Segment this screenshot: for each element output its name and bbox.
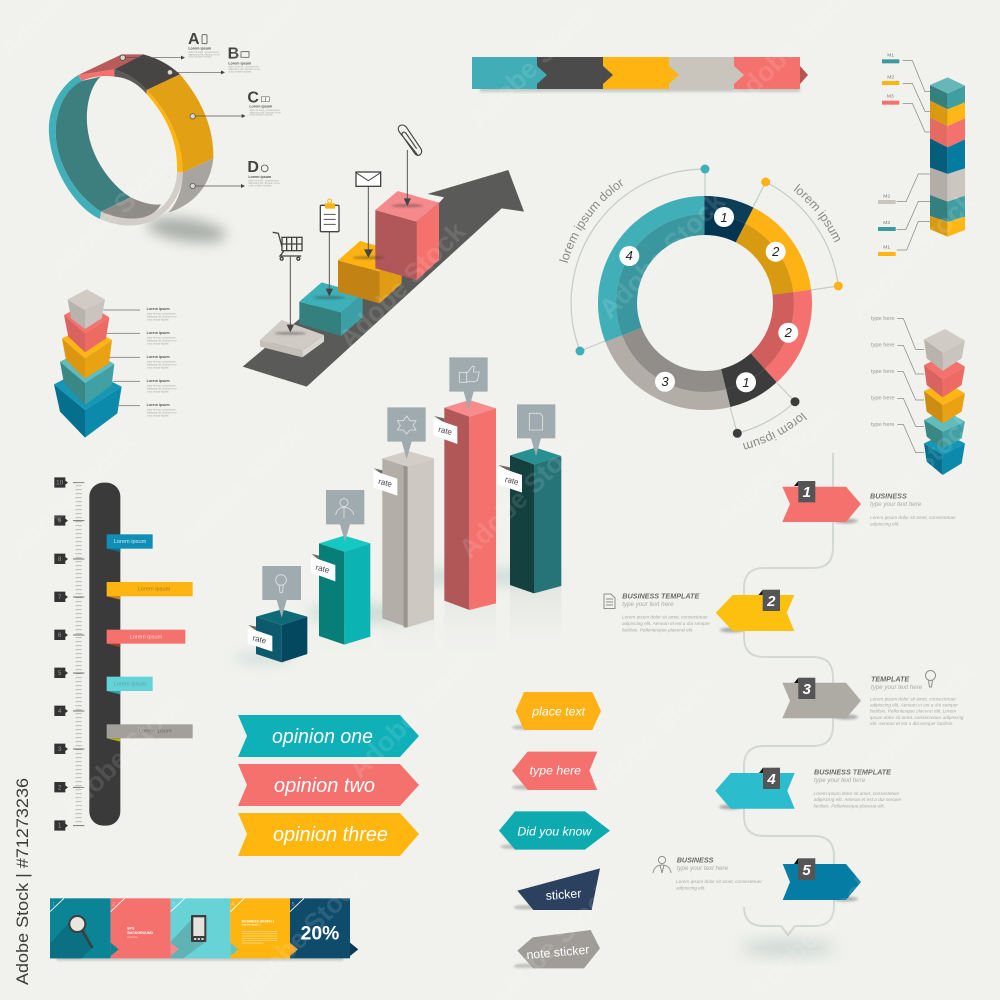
ribbon: opinion three: opinion three (273, 824, 388, 846)
donut chart (559, 164, 843, 450)
step 1 tan slab (260, 320, 324, 357)
watermark: Adobe Stock (583, 666, 722, 804)
text: business template: type your text here (814, 777, 866, 784)
callout A (120, 31, 220, 60)
watermark: Adobe Stock (343, 646, 482, 784)
pyramid labels: a dui semper facilisis. (147, 342, 170, 345)
arrow with stepped boxes (243, 125, 524, 387)
segment number badges: 2 (771, 244, 780, 259)
ring: red segment (78, 54, 143, 81)
sticker: place text (516, 692, 601, 730)
sticker: sticker (517, 868, 600, 910)
ring chart with labels A B C D (49, 31, 281, 247)
flag: blue: Lorem ipsum (114, 539, 147, 545)
red layer (64, 303, 109, 352)
icon: shopping cart (273, 232, 302, 260)
text: business: adipiscing elit. (676, 886, 705, 890)
M labels and swatches: M1 (883, 245, 890, 251)
segment number badges: 2 (784, 325, 793, 340)
strip: end tip (800, 66, 808, 84)
ribbon: opinion one (238, 715, 419, 757)
callout D: D (247, 159, 259, 176)
arrow: grey (782, 683, 861, 718)
pyramid labels: Lorem ipsum (147, 331, 170, 335)
pyramid labels: dolor sit amet, consectetuer (147, 408, 176, 411)
timeline step 1 (782, 481, 956, 526)
arrow: blue (783, 864, 861, 900)
text: business template (622, 592, 710, 632)
column top (930, 77, 965, 93)
arrow shadow (834, 518, 858, 524)
outer bracket arcs and dots (571, 164, 843, 438)
sticker: type here: type here (530, 763, 581, 777)
callout B: dolor sit amet, consectetuer (228, 66, 259, 69)
step 2 red panel: template (127, 935, 138, 939)
text: business: adipiscing elit. (870, 522, 899, 526)
strip: teal pointer (537, 66, 547, 84)
callout 2 person (326, 490, 364, 542)
segment number badges: 1 (720, 210, 728, 225)
flag: blue (107, 534, 153, 552)
scale number tags: 10 (56, 480, 64, 487)
column left faces (930, 85, 948, 237)
outer band segments (607, 205, 803, 401)
callout B: a dui semper facilisis. (228, 70, 252, 73)
icon: envelope (356, 172, 381, 186)
arrow: red (782, 487, 861, 522)
scale number tags: 7 (58, 594, 62, 601)
step 3 cyan panel (171, 898, 230, 958)
text: business template: facilisis. Pellentesque placerat elit. (814, 804, 885, 808)
step 4 yellow panel: business graph 1 (242, 924, 261, 927)
M labels and swatches: M1 (887, 52, 894, 58)
ring: grey inner surface (101, 197, 161, 219)
major ruler ticks (73, 483, 84, 826)
callout D (190, 159, 280, 189)
sticker: did you know: Did you know (517, 824, 592, 838)
text: business template: type your text here (622, 601, 674, 608)
type here labels: type here (871, 369, 895, 375)
pyramid labels: Lorem ipsum (147, 355, 170, 359)
top segmented strip (472, 57, 808, 92)
sticker: type here (512, 752, 597, 790)
scale number tags: 5 (58, 670, 62, 677)
callout B: B (228, 45, 239, 62)
ring: dark segment (114, 54, 180, 94)
strip shadow (57, 956, 343, 961)
flag: yellow: Lorem ipsum (138, 587, 171, 593)
flag: cyan: Lorem ipsum (114, 682, 147, 688)
step 1 teal panel: 1 (52, 902, 55, 908)
rate tag 1: rate (252, 633, 268, 646)
text: business: Lorem ipsum dolor sit amet, consectetuer (676, 879, 762, 884)
number tag 3: 3 (803, 681, 812, 698)
bottom five-step strip (50, 898, 358, 961)
text: template: facilisis. Pellentesque placerat elit. Lorem (870, 708, 956, 714)
callout A: A (188, 31, 200, 48)
text: template: adipiscing elit. Aenean et est a dui semper (870, 702, 958, 708)
rate tag 1 (248, 625, 272, 652)
icon: document (604, 594, 615, 608)
step 4 red box (375, 191, 439, 280)
ring: teal rim (49, 75, 101, 219)
scale number tags: 9 (58, 518, 62, 525)
step 2 red panel (111, 898, 171, 958)
arrow: yellow (716, 595, 794, 631)
dark vertical bar (89, 483, 120, 826)
timeline step 3 (782, 670, 964, 726)
number tag 3 (794, 678, 815, 699)
strip: yellow pointer (669, 66, 679, 84)
pointer arrow to step 1 (287, 257, 294, 332)
M labels and swatches: M3 (883, 220, 890, 226)
text: template: ipsum dolor sit amet, consectetuer adipiscing (870, 715, 964, 720)
bar 5 deep teal (510, 448, 561, 593)
callout C: adipiscing elit. Aenean et est (249, 111, 281, 114)
step 2 red panel: 2 (112, 902, 115, 908)
M labels and swatches: M3 (887, 94, 894, 100)
callout A: a dui semper facilisis. (188, 56, 212, 59)
callout 4 thumbs up (449, 357, 488, 409)
curved label: lorem ipsum right: lorem ipsum (794, 184, 840, 242)
watermark: Adobe Stock (843, 186, 982, 324)
callout D: adipiscing elit. Aenean et est (248, 182, 280, 185)
stacked column with M labels (878, 52, 965, 256)
bar 4 red (444, 400, 496, 610)
flag: yellow (107, 582, 193, 600)
watermark: Adobe Stock (593, 186, 732, 324)
step 3 cyan panel: 3 (172, 902, 175, 908)
pyramid labels: dolor sit amet, consectetuer (147, 312, 176, 315)
callout D: Lorem ipsum (248, 175, 272, 179)
ribbon: opinion three (238, 813, 419, 856)
step 2 red panel: EPS (127, 926, 135, 930)
callout A: Lorem ipsum (188, 47, 212, 51)
process timeline connector (744, 453, 834, 935)
yellow layer (62, 327, 112, 378)
type here labels: type here (871, 395, 895, 401)
sticker: note sticker: note sticker (526, 943, 590, 962)
yellow cube (924, 382, 965, 423)
callout A: dolor sit amet, consectetuer (188, 51, 219, 54)
text: template (870, 674, 964, 726)
callout 5 document (517, 404, 555, 456)
bar 3 tan (382, 451, 434, 627)
type here labels: type here (871, 422, 895, 428)
callout C: a dui semper facilisis. (249, 114, 273, 117)
red cube (924, 355, 965, 397)
icon: paper clip (398, 125, 422, 155)
rate tag 5: rate (504, 475, 520, 487)
text: business template: adipiscing elit. Aenean et est a dui semper (814, 797, 902, 802)
pyramid labels (147, 307, 177, 417)
drop shadows on box tops (274, 204, 423, 335)
flag: grey (107, 724, 193, 742)
ribbon: opinion two (238, 764, 419, 806)
opinion ribbons (238, 715, 419, 856)
segment number badges (619, 207, 798, 392)
flag: cyan (107, 677, 153, 694)
strip: dark segment (537, 57, 603, 89)
pointer arrow to step 4 (404, 150, 411, 206)
blue layer (54, 368, 122, 438)
callout 3 star (387, 407, 426, 459)
text: business template: facilisis. Pellentesque placerat elit. (622, 628, 693, 632)
pyramid labels: Lorem ipsum (147, 403, 170, 407)
pyramid labels: adipiscing elit. Aenean et est (147, 315, 177, 318)
text: template: Lorem ipsum dolor sit amet, consectetuer (870, 696, 956, 702)
strip: tan segment (669, 57, 734, 89)
tan cube (924, 329, 965, 371)
tan layer (68, 289, 105, 329)
text: template: type your text here (871, 684, 923, 691)
ring: tan rim (100, 172, 183, 226)
column right faces (948, 86, 965, 237)
watermark: Adobe Stock (843, 406, 982, 544)
watermark: Adobe Stock (3, 426, 142, 564)
leader lines (103, 310, 140, 406)
flag: red: Lorem ipsum (130, 634, 163, 640)
callout C (190, 90, 281, 119)
blue cube (924, 433, 965, 475)
callout D: dolor sit amet, consectetuer (248, 180, 279, 183)
stickers column (499, 692, 610, 968)
M labels and swatches: M2 (887, 74, 894, 80)
icon: clipboard (320, 199, 339, 232)
number tag 1 (794, 481, 815, 502)
callout C: C (247, 90, 259, 107)
step 5 navy panel: 20% (301, 923, 339, 944)
scale number tags: 1 (58, 823, 62, 830)
text: template: elit. Aenean et est a dui semper facilisis. (870, 721, 953, 726)
rate tag 5 (498, 465, 522, 493)
step 4 yellow panel: BUSINESS GRAPH 1 (242, 919, 275, 923)
strip: red segment (734, 57, 800, 89)
flag: red (107, 630, 185, 647)
strip shadow (480, 86, 800, 92)
text: business template: Lorem ipsum dolor sit amet, consectetuer (622, 614, 708, 620)
scale number tags: 4 (58, 708, 62, 715)
callout A: adipiscing elit. Aenean et est (188, 53, 220, 56)
M labels and swatches: M2 (883, 193, 890, 199)
rate tag 4: rate (437, 425, 453, 437)
inner band segments (626, 224, 784, 382)
timeline base shadow (740, 942, 836, 954)
flag: grey: Lorem ipsum (139, 729, 172, 735)
rate tag 4 (433, 416, 457, 444)
timeline step 4 (715, 768, 902, 810)
text: business (870, 492, 956, 526)
number tag 4: 4 (766, 771, 776, 788)
strip: yellow segment (603, 57, 669, 89)
M labels and swatches (878, 52, 899, 256)
teal cube (924, 410, 965, 449)
callout 1 bulb (262, 566, 301, 618)
leader lines (897, 319, 924, 453)
minor ruler ticks (69, 485, 88, 823)
right cube stack with type here labels (871, 316, 965, 475)
scale number tags: 3 (58, 746, 62, 753)
rate tag 3 (373, 468, 397, 496)
arrow shadow (719, 804, 743, 810)
watermark: Adobe Stock (463, 0, 602, 134)
type here labels: type here (871, 316, 895, 322)
pyramid labels: a dui semper facilisis. (147, 390, 170, 393)
segment number badges: 4 (626, 248, 633, 263)
text: template: TEMPLATE (871, 674, 909, 684)
pyramid labels: adipiscing elit. Aenean et est (147, 387, 177, 390)
timeline step 2 (604, 590, 794, 632)
ribbon: opinion two: opinion two (274, 775, 375, 797)
curved label: lorem ipsum dolor: lorem ipsum dolor (559, 179, 623, 263)
callout B (167, 45, 260, 75)
step 2 teal box (299, 282, 363, 336)
type here labels: type here (871, 342, 895, 348)
pointer arrow to step 2 (326, 232, 333, 296)
number tag 2 (758, 590, 780, 611)
rate tag 3: rate (377, 477, 393, 489)
step 4 yellow panel: 4 (232, 902, 235, 908)
rate tag 2 (311, 554, 335, 581)
rate tag 2: rate (315, 563, 331, 575)
number tag 4 (759, 768, 780, 789)
scale number tags: 8 (58, 556, 62, 563)
ring: yellow segment (147, 74, 213, 173)
3D bar chart (233, 357, 561, 670)
text: business template: adipiscing elit. Aenean et est a dui semper (622, 621, 710, 626)
pyramid labels: a dui semper facilisis. (147, 366, 170, 369)
number tag 5 (794, 858, 815, 880)
bar 1 dark teal (256, 609, 307, 662)
left pyramid stack with labels (54, 289, 177, 438)
segment number badges: 1 (742, 375, 750, 390)
floor shadows and reflections (233, 568, 561, 670)
watermark: Adobe Stock (453, 426, 592, 564)
pointer arrow to step 3 (364, 187, 373, 258)
text: business template: BUSINESS TEMPLATE (622, 592, 699, 600)
text: business: BUSINESS (677, 856, 714, 864)
ring: grey segment outer (168, 158, 213, 213)
strip: teal segment (472, 57, 537, 89)
thermometer scale (54, 477, 193, 831)
icon: smartphone (191, 915, 206, 942)
step 2 red panel: BACKGROUND (127, 931, 153, 935)
sticker: sticker: sticker (545, 886, 582, 903)
text: business (676, 856, 762, 890)
arrow shadow (720, 628, 744, 632)
strip: dark pointer (603, 66, 613, 84)
icon: magnifier (69, 916, 92, 947)
watermark: Adobe Stock (843, 656, 982, 794)
curved label: lorem ipsum bottom: lorem ipsum (743, 412, 808, 450)
callout D: a dui semper facilisis. (248, 184, 272, 187)
step 1 teal panel (50, 898, 111, 958)
notch highlight (422, 194, 444, 203)
callout C: Lorem ipsum (249, 104, 273, 108)
pyramid labels: dolor sit amet, consectetuer (147, 384, 176, 387)
pyramid labels: a dui semper facilisis. (147, 318, 170, 321)
sticker: did you know (499, 811, 610, 850)
watermark: Adobe Stock (53, 686, 192, 824)
number tag 5: 5 (802, 862, 811, 879)
scale number tags: 2 (58, 784, 62, 791)
vertical stock id caption: Adobe Stock | #71273236 (13, 778, 32, 985)
text: business: Lorem ipsum dolor sit amet, consectetuer (870, 515, 956, 520)
watermark: Adobe Stock (333, 216, 472, 354)
sticker: note sticker (517, 930, 600, 968)
text: business: type your text here (677, 865, 729, 872)
text: business template (814, 768, 902, 808)
pyramid labels: adipiscing elit. Aenean et est (147, 339, 177, 342)
watermark: Adobe Stock (708, 396, 847, 534)
pyramid labels: a dui semper facilisis. (147, 414, 170, 417)
timeline step 5 (653, 856, 861, 902)
step 5 navy panel: 5 (292, 902, 295, 908)
scale number tags: 6 (58, 632, 62, 639)
ring: teal inner surface (56, 77, 131, 212)
leader lines (897, 61, 930, 250)
teal layer (60, 348, 114, 405)
callout B: adipiscing elit. Aenean et est (228, 68, 260, 71)
text: business template: Lorem ipsum dolor sit amet, consectetuer (814, 791, 900, 796)
dark growth arrow (243, 170, 524, 387)
icon: person (653, 856, 671, 873)
text: business: type your text here (870, 501, 922, 508)
watermark: Adobe Stock (173, 416, 312, 554)
icon: lightbulb (926, 670, 936, 687)
pyramid labels: Lorem ipsum (147, 307, 170, 311)
number tag 1: 1 (803, 484, 811, 501)
step 5 navy panel (290, 898, 358, 958)
arrow: cyan (715, 773, 795, 809)
ribbon: opinion one: opinion one (272, 726, 373, 748)
text: business template: BUSINESS TEMPLATE (814, 768, 891, 776)
bar 2 bright teal (319, 536, 370, 645)
segment number badges: 3 (661, 374, 669, 389)
pyramid labels: adipiscing elit. Aenean et est (147, 363, 177, 366)
type here labels (871, 316, 895, 428)
text: business: BUSINESS (870, 492, 907, 500)
callout B: Lorem ipsum (228, 61, 252, 65)
sticker shadows (500, 725, 536, 968)
sticker: place text: place text (531, 705, 586, 719)
strip: tan pointer (734, 66, 744, 84)
number tag 2: 2 (766, 593, 776, 610)
callout C: dolor sit amet, consectetuer (249, 109, 280, 112)
watermark: Adobe Stock (43, 146, 182, 284)
pyramid labels: adipiscing elit. Aenean et est (147, 411, 177, 414)
pyramid labels: dolor sit amet, consectetuer (147, 360, 176, 363)
pyramid labels: dolor sit amet, consectetuer (147, 336, 176, 339)
arrow shadow (834, 896, 858, 902)
ring shadow (145, 213, 228, 247)
step 4 yellow panel (230, 898, 290, 958)
arrow shadow (834, 714, 858, 720)
scale number tags (54, 477, 68, 831)
pyramid labels: Lorem ipsum (147, 379, 170, 383)
step 3 yellow box (338, 241, 402, 303)
